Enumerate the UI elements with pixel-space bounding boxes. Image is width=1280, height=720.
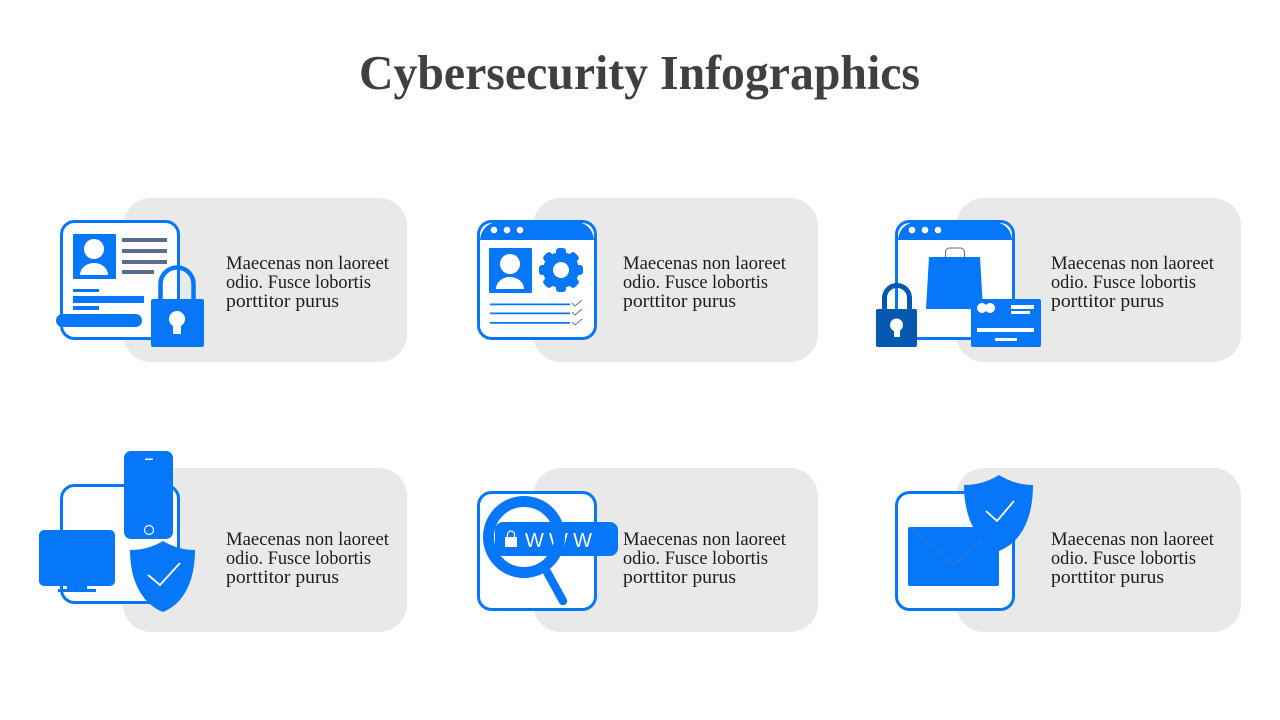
panel: secure shopping: [876, 198, 1241, 362]
text block: porttitor purus: [1051, 292, 1164, 312]
panel background: [956, 468, 1241, 632]
text block: Maecenas non laoreet: [623, 530, 787, 550]
icon: dark padlock: [876, 286, 917, 347]
icon: magnifier over www bar: [478, 492, 618, 610]
text block: odio. Fusce lobortis: [623, 273, 768, 293]
icon: phone, monitor and shield: [39, 451, 195, 612]
icon: monitor: [39, 530, 115, 592]
text block: porttitor purus: [623, 568, 736, 588]
panel background: [123, 468, 407, 632]
panel: email security: [896, 468, 1241, 632]
text block: Maecenas non laoreet: [1051, 530, 1215, 550]
text block: [1051, 254, 1215, 312]
panel: device protection: [39, 451, 407, 632]
panel background: [533, 198, 818, 362]
panel: secure browsing: [478, 468, 818, 632]
panel: identity card lock: [56, 198, 407, 362]
text block: odio. Fusce lobortis: [1051, 273, 1196, 293]
text block: porttitor purus: [226, 292, 339, 312]
icon: shop window with bag, card and lock: [876, 222, 1041, 347]
text block: porttitor purus: [1051, 568, 1164, 588]
text block: odio. Fusce lobortis: [226, 549, 371, 569]
text block: [1051, 530, 1215, 588]
text block: Maecenas non laoreet: [226, 254, 390, 274]
icon: credit card: [971, 299, 1041, 347]
icon: profile document with padlock: [56, 222, 204, 347]
icon: gear: [539, 248, 583, 292]
text block: [226, 530, 390, 588]
text block: Maecenas non laoreet: [623, 254, 787, 274]
icon: browser window with profile and gear: [478, 222, 596, 338]
panel background: [123, 198, 407, 362]
icon: magnifier over www bar: WWW: [525, 530, 592, 552]
icon: envelope with shield: [896, 475, 1033, 610]
panel background: [533, 468, 818, 632]
panel background: [956, 198, 1241, 362]
text block: odio. Fusce lobortis: [226, 273, 371, 293]
text block: [226, 254, 390, 312]
text block: Maecenas non laoreet: [1051, 254, 1215, 274]
text block: Maecenas non laoreet: [226, 530, 390, 550]
title: Cybersecurity Infographics: [359, 45, 920, 100]
text block: porttitor purus: [623, 292, 736, 312]
icon: phone: [124, 451, 173, 539]
text block: [623, 530, 787, 588]
text block: odio. Fusce lobortis: [623, 549, 768, 569]
panel: profile settings window: [478, 198, 818, 362]
text block: odio. Fusce lobortis: [1051, 549, 1196, 569]
text block: porttitor purus: [226, 568, 339, 588]
icon: shield: [130, 541, 195, 612]
text block: [623, 254, 787, 312]
